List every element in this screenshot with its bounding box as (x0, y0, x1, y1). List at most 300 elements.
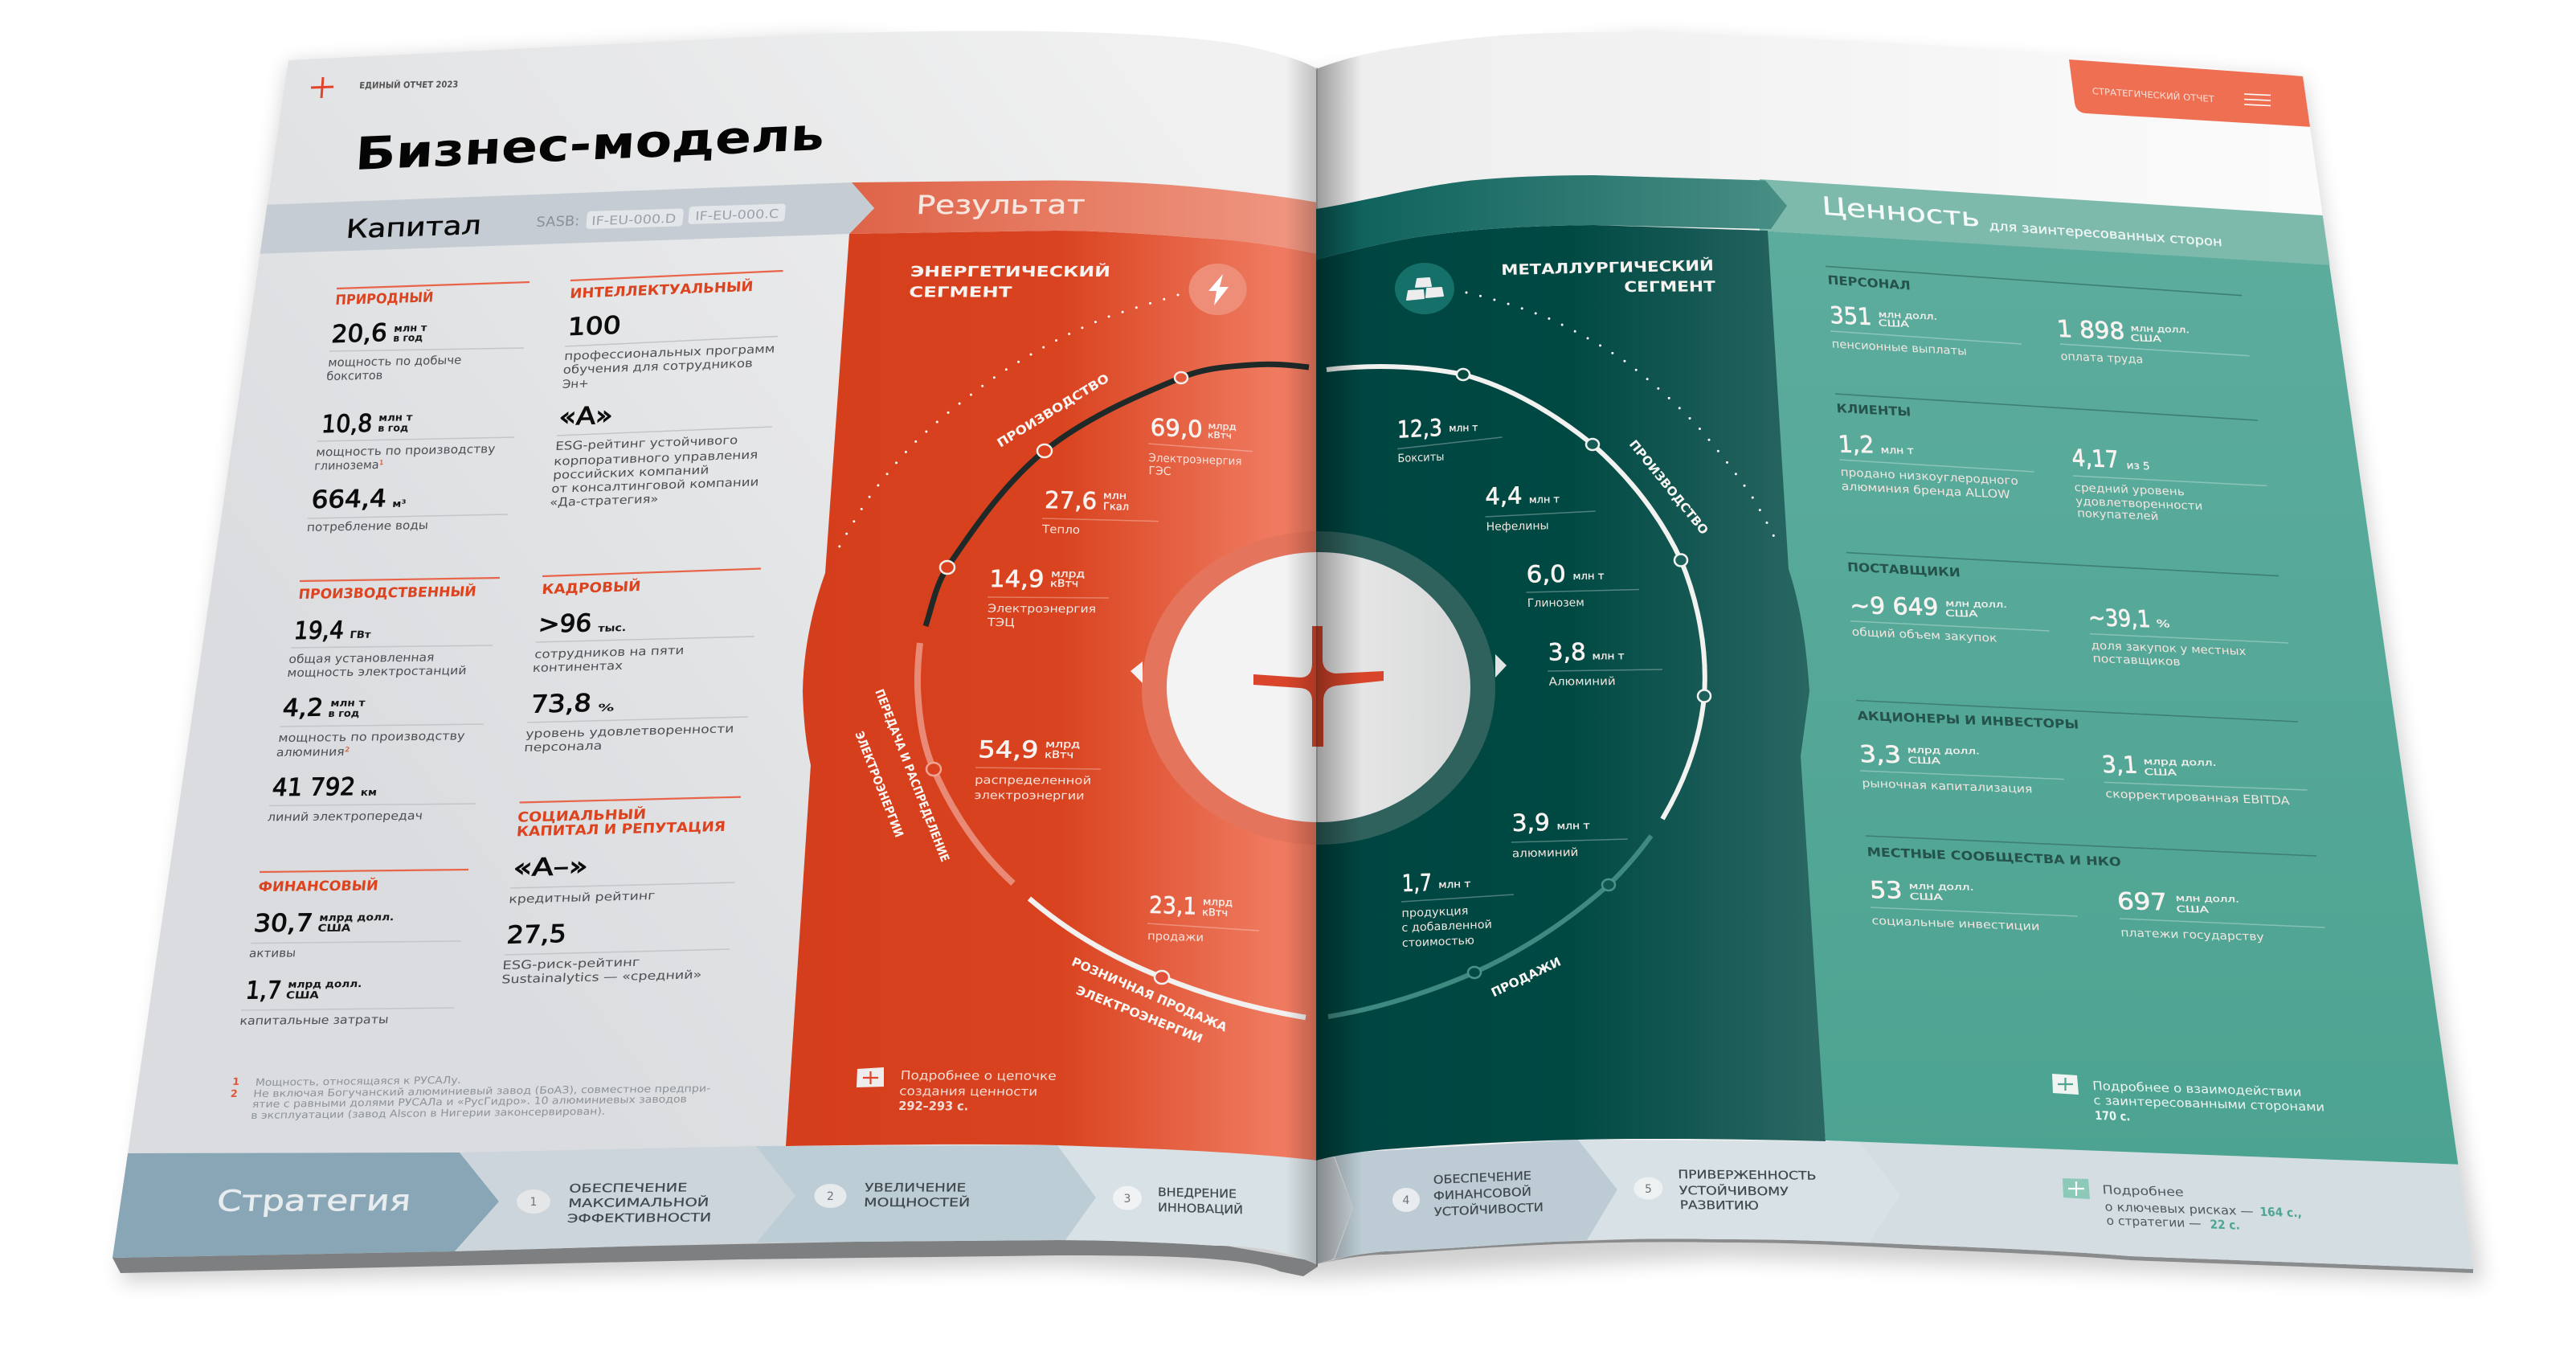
metric 69,0: ГЭС (1149, 465, 1171, 478)
strategy item 1: МАКСИМАЛЬНОЙ (568, 1195, 709, 1210)
metric 3,9: млн т (1556, 819, 1590, 832)
metric 30,7 (252, 909, 395, 938)
description: ESG rating: от консалтинговой компании (551, 476, 759, 496)
description: alumina capacity: глинозема¹ (314, 459, 384, 473)
description: employees: континентах (532, 660, 624, 675)
description: installed capacity: общая установленная (288, 652, 435, 666)
metric 19,4: ГВт (350, 628, 372, 641)
metric 4,2: 4,2 (281, 694, 325, 723)
metric 351: млн долл. (1878, 309, 1937, 322)
metric A: «А» (558, 402, 614, 432)
strategy item 4: ФИНАНСОВОЙ (1433, 1185, 1531, 1203)
stakeholders: shareholders (1856, 701, 2308, 808)
footnotes: ятие с равными долями РУСАЛа и «РусГидро». 10 алюминиевых заводов (251, 1093, 688, 1110)
metric 12,3 (1397, 414, 1503, 465)
right page background (1316, 24, 2481, 1278)
metric 27,6: Тепло (1041, 523, 1080, 537)
stakeholders: personnel (1826, 266, 2250, 366)
ring left half (1142, 531, 1495, 845)
section tab label: СТРАТЕГИЧЕСКИЙ ОТЧЕТ (2092, 86, 2214, 104)
value heading: для заинтересованных сторон (1989, 218, 2222, 249)
stakeholders: communities (1866, 836, 2325, 944)
metric 12,3: млн т (1449, 421, 1478, 434)
metric 20,6: млн т (394, 321, 428, 334)
metric 4,2 (281, 694, 366, 723)
metallurgy segment title: МЕТАЛЛУРГИЧЕСКИЙ (1501, 256, 1714, 279)
left page background (104, 24, 1318, 1278)
metric 27,5: 27,5 (505, 920, 567, 950)
label: retail: РОЗНИЧНАЯ ПРОДАЖА (1069, 955, 1229, 1035)
metric 1 898: млн долл. (2130, 323, 2190, 335)
result heading: Результат (916, 190, 1086, 220)
strategy item 3: ВНЕДРЕНИЕ (1158, 1186, 1237, 1201)
dotted orbit: metallurgy (1466, 293, 1778, 545)
more info text: risks: Подробнее (2102, 1182, 2184, 1199)
more info text: stakeholders (2091, 1079, 2325, 1124)
footnotes: Не включая Богучанский алюминиевый завод (БоАЗ), совместное предпри- (253, 1082, 711, 1099)
metric 100: 100 (566, 312, 622, 342)
metric 9 649: США (1945, 608, 1978, 619)
metric 4,17 (2071, 444, 2267, 523)
metric 1,7 sales: с добавленной (1401, 919, 1492, 935)
more info text: value chain (898, 1068, 1057, 1113)
metric >96: >96 (538, 609, 593, 639)
label: sales: ПРОДАЖИ (1489, 954, 1564, 1000)
metric 1,2: млн т (1880, 444, 1914, 457)
more info text: stakeholders: с заинтересованными сторонами (2093, 1093, 2325, 1115)
metric 1 898: 1 898 (2056, 315, 2126, 345)
capital: industrial (267, 578, 500, 824)
metric 1,7 sales: стоимостью (1402, 934, 1474, 950)
gutter shadow right (1316, 24, 1364, 1278)
more info text: risks: о стратегии — (2106, 1214, 2202, 1230)
metric 53: социальные инвестиции (1871, 915, 2040, 933)
more info text: value chain: создания ценности (899, 1084, 1038, 1099)
description: satisfaction: персонала (524, 739, 603, 755)
description: alumina capacity (314, 443, 496, 473)
metric 1,7 sales: млн т (1438, 878, 1470, 890)
metric 69,0: 69,0 (1151, 414, 1203, 443)
strategy item 5 (1634, 1169, 1817, 1213)
metric 664,4: 664,4 (310, 485, 387, 514)
strategy item 1 (517, 1181, 712, 1226)
footnotes: Мощность, относящаяся к РУСАЛу. (255, 1074, 462, 1088)
SASB label: SASB: (536, 213, 580, 231)
centre disc left (1167, 552, 1470, 822)
description: credit rating: кредитный рейтинг (509, 890, 656, 907)
heading: social (516, 805, 726, 840)
metric 1,7 sales (1401, 869, 1514, 950)
icon: ingots (1395, 263, 1454, 314)
heading: personnel: ПЕРСОНАЛ (1827, 272, 1911, 293)
metric 3,3 (1858, 740, 2064, 796)
strategy item 2: 2 (827, 1190, 834, 1203)
metric 23,1: 23,1 (1149, 891, 1197, 919)
strategy chevron 5 (1578, 1140, 1900, 1247)
metric 1,7 (244, 976, 362, 1005)
description: ESG risk rating (501, 956, 702, 986)
metric 4,17: средний уровень (2074, 481, 2185, 498)
icon: menu (2244, 94, 2271, 106)
metric 3,8 (1548, 638, 1662, 689)
metric 12,3: Бокситы (1397, 451, 1445, 465)
label: retail: ЭЛЕКТРОЭНЕРГИИ (1074, 983, 1204, 1046)
strategy chevron 3 (1058, 1146, 1316, 1264)
metric 3,1: США (2144, 767, 2177, 778)
central ring (1131, 531, 1507, 845)
metric 20,6: в год (393, 331, 423, 344)
strategy arrow band (104, 1153, 499, 1260)
metric 10,8: 10,8 (321, 410, 374, 439)
metric 39,1: % (2156, 617, 2170, 630)
logo mark (311, 77, 333, 98)
metric 69,0: млрд (1208, 421, 1237, 432)
left page (104, 24, 1318, 1278)
strategy chevron 4 (1334, 1140, 1617, 1262)
description: water: потребление воды (306, 519, 429, 534)
strategy title: Стратегия (215, 1184, 412, 1218)
description: installed capacity (287, 652, 467, 680)
metric 9 649: млн долл. (1945, 598, 2007, 610)
more info box: value chain (857, 1067, 884, 1087)
metallurgy header band (1316, 175, 1787, 260)
stakeholders: customers (1835, 394, 2267, 523)
strategy item 1: ОБЕСПЕЧЕНИЕ (569, 1181, 688, 1196)
metric 4,17: удовлетворенности (2075, 495, 2203, 513)
strategy item 3: 3 (1124, 1193, 1131, 1206)
capital: human (524, 569, 761, 755)
value heading (1821, 192, 2222, 249)
capital header (345, 203, 786, 244)
metric 73,8 (530, 690, 615, 719)
metric 73,8: % (598, 701, 615, 714)
metric 3,9: алюминий (1512, 846, 1579, 860)
metric 1,7: США (285, 989, 320, 1001)
metric A-: «А–» (512, 853, 589, 882)
description: alumina capacity: мощность по производству (316, 443, 496, 460)
strategy item 4 (1392, 1170, 1544, 1219)
metric 6,0 (1526, 560, 1639, 610)
SASB chip 1 (586, 208, 684, 229)
left arrowhead (1131, 661, 1143, 683)
metric 3,8: 3,8 (1548, 638, 1586, 665)
metric 3,9: 3,9 (1511, 809, 1550, 837)
metric 14,9 (986, 565, 1109, 629)
icon: lightning bolt (1189, 264, 1247, 315)
metric 69,0 (1148, 414, 1253, 478)
metric 27,6: 27,6 (1045, 486, 1098, 514)
capital title: Капитал (345, 210, 482, 244)
description: ESG rating: корпоративного управления (554, 448, 758, 469)
description: bauxite capacity (326, 354, 462, 383)
metric 19,4: 19,4 (292, 616, 346, 645)
heading: social: СОЦИАЛЬНЫЙ (517, 805, 647, 826)
metric 9 649: ~9 649 (1849, 592, 1939, 620)
strategy chevron 1 (455, 1146, 795, 1251)
heading: financial: ФИНАНСОВЫЙ (257, 877, 379, 895)
description: assets: активы (248, 947, 296, 960)
metric 10,8 (321, 410, 414, 439)
metric 54,9: электроэнергии (974, 789, 1085, 803)
metric 14,9: ТЭЦ (986, 616, 1015, 629)
metric 3,8: млн т (1592, 649, 1625, 661)
heading: customers: КЛИЕНТЫ (1836, 401, 1912, 420)
metric 54,9 (974, 735, 1101, 803)
metric 697: США (2176, 904, 2210, 915)
strategy item 5: РАЗВИТИЮ (1680, 1199, 1759, 1213)
arc: retail (1029, 899, 1306, 1017)
metric 53: 53 (1869, 876, 1903, 904)
metric 4,4: млн т (1529, 493, 1560, 506)
metric 4,2: млн т (330, 697, 366, 709)
label: production metals: ПРОИЗВОДСТВО (1626, 437, 1711, 538)
metric 1 898: США (2130, 333, 2162, 344)
metric 3,1: скорректированная EBITDA (2105, 788, 2291, 808)
metric 14,9: млрд (1051, 567, 1085, 579)
metric 10,8: млн т (378, 411, 414, 424)
metric 20,6: 20,6 (330, 319, 388, 349)
label: transmission (852, 687, 952, 864)
metric 1,7: млрд долл. (288, 977, 362, 990)
metric 1,7: 1,7 (244, 976, 283, 1005)
dotted orbit: energy (836, 295, 1178, 552)
metric 54,9: распределенной (975, 774, 1091, 788)
book page block thickness (112, 1236, 2473, 1276)
metric 39,1: доля закупок у местных (2091, 639, 2247, 658)
metric 14,9: кВтч (1050, 577, 1078, 589)
metric 1 898 (2056, 315, 2250, 366)
strategy item 5: 5 (1645, 1183, 1652, 1196)
strategy item 4: УСТОЙЧИВОСТИ (1434, 1200, 1544, 1219)
metric 14,9: Электроэнергия (987, 603, 1096, 616)
strategy item 1: ЭФФЕКТИВНОСТИ (566, 1212, 712, 1226)
description: satisfaction (524, 723, 734, 755)
more info text: stakeholders: Подробнее о взаимодействии (2091, 1079, 2302, 1099)
more info text: risks: 164 с., (2259, 1205, 2302, 1220)
strategy item 1: 1 (530, 1196, 537, 1209)
metric 23,1: продажи (1147, 930, 1204, 944)
description: bauxite capacity: бокситов (326, 370, 383, 383)
arc: transmission and distribution (918, 643, 1013, 883)
metric 6,0: Глинозем (1527, 596, 1584, 610)
strategy item 3: ИННОВАЦИЙ (1158, 1200, 1243, 1217)
heading: shareholders: АКЦИОНЕРЫ И ИНВЕСТОРЫ (1857, 709, 2079, 732)
metric 1,2: продано низкоуглеродного (1840, 466, 2018, 488)
metric 39,1: ~39,1 (2087, 604, 2152, 633)
description: installed capacity: мощность электростанций (287, 665, 467, 680)
heading: natural: ПРИРОДНЫЙ (335, 288, 434, 309)
description: ESG risk rating: ESG-риск-рейтинг (502, 956, 640, 972)
metric 20,6 (330, 319, 428, 349)
metric 3,1: млрд долл. (2143, 756, 2217, 768)
red result panel (786, 231, 1318, 1161)
value heading: Ценность (1821, 192, 1981, 233)
heading: communities: МЕСТНЫЕ СООБЩЕСТВА И НКО (1867, 845, 2122, 870)
metric 4,17: 4,17 (2071, 444, 2120, 473)
more info text: value chain: Подробнее о цепочке (900, 1068, 1057, 1083)
metric 6,0: млн т (1572, 570, 1605, 582)
description: employees: сотрудников на пяти (534, 645, 685, 661)
metric 9 649 (1849, 592, 2050, 645)
capital: intellectual (550, 271, 783, 510)
description: power lines: линий электропередач (267, 810, 423, 824)
metric 4,17: из 5 (2126, 459, 2150, 472)
footnotes (230, 1074, 711, 1121)
centre cross (1253, 626, 1384, 747)
metric 3,3: рыночная капитализация (1862, 777, 2033, 796)
metric 3,9 (1511, 809, 1628, 860)
section tab (2069, 59, 2312, 127)
heading: industrial: ПРОИЗВОДСТВЕННЫЙ (297, 583, 477, 603)
metric 1 898: оплата труда (2060, 350, 2144, 366)
metric 12,3: 12,3 (1397, 414, 1442, 444)
metric 39,1 (2087, 604, 2288, 669)
metric 3,1 (2101, 751, 2308, 808)
description: satisfaction: уровень удовлетворенности (525, 723, 734, 741)
capital header band (253, 182, 874, 254)
metric 3,1: 3,1 (2101, 751, 2139, 779)
label: transmission: ПЕРЕДАЧА И РАСПРЕДЕЛЕНИЕ (872, 687, 952, 864)
strategy item 4: ОБЕСПЕЧЕНИЕ (1433, 1170, 1531, 1187)
metric 3,8: Алюминий (1548, 675, 1616, 689)
metric 4,2: в год (328, 707, 360, 719)
metric 4,4: 4,4 (1485, 481, 1523, 510)
description: ESG rating: «Да-стратегия» (550, 493, 659, 510)
metric 3,3: 3,3 (1858, 740, 1902, 768)
SASB chip 2: IF-EU-000.C (695, 207, 779, 223)
description: aluminium capacity: алюминия ² (276, 746, 350, 759)
metric 4,4: Нефелины (1486, 519, 1549, 534)
metric 351: пенсионные выплаты (1831, 338, 1967, 358)
metallurgy segment title: СЕГМЕНТ (1624, 278, 1716, 296)
metric 9 649: общий объем закупок (1851, 626, 1997, 645)
metric 1,2: 1,2 (1838, 431, 1875, 458)
strategy item 2: УВЕЛИЧЕНИЕ (865, 1182, 966, 1195)
strategy item 5: ПРИВЕРЖЕННОСТЬ (1678, 1169, 1817, 1183)
metric 30,7: США (317, 922, 352, 934)
label: transmission: ЭЛЕКТРОЭНЕРГИИ (852, 729, 906, 839)
metric 351 (1829, 301, 2022, 358)
description: ESG rating: российских компаний (553, 464, 709, 482)
metric 10,8: в год (378, 421, 409, 434)
metric 351: США (1878, 317, 1910, 330)
metric 1,7 sales: продукция (1401, 905, 1469, 920)
metric 351: 351 (1829, 301, 1872, 330)
heading: suppliers: ПОСТАВЩИКИ (1847, 560, 1961, 580)
capital: natural (306, 282, 530, 534)
SASB chip 2 (688, 203, 786, 224)
more info box: stakeholders (2052, 1074, 2079, 1095)
capital: financial (239, 870, 468, 1028)
metric 3,3: млрд долл. (1907, 745, 1980, 756)
metric 4,4 (1485, 481, 1596, 534)
value panel (1760, 231, 2463, 1165)
footnotes: 2 (230, 1087, 238, 1099)
metric 54,9: кВтч (1045, 748, 1073, 760)
label: production energy: ПРОИЗВОДСТВО (995, 371, 1112, 450)
gutter shadow left (1286, 24, 1318, 1278)
metric 73,8: 73,8 (530, 690, 592, 719)
stakeholders: suppliers (1846, 553, 2288, 669)
metric 53: млн долл. (1908, 881, 1974, 893)
metric 54,9: млрд (1045, 738, 1080, 750)
arc: metal production (1327, 366, 1711, 819)
footnotes: 1 (232, 1075, 240, 1087)
spine line (1316, 68, 1318, 1266)
metric 664,4: м³ (392, 497, 407, 510)
strategy item 5: УСТОЙЧИВОМУ (1679, 1183, 1789, 1198)
description: training: обучения для сотрудников (562, 358, 753, 377)
strategy item 3 (1113, 1186, 1243, 1217)
dark teal panel (1316, 225, 1826, 1161)
page title: Бизнес-модель (354, 108, 826, 181)
arc: energy production (926, 364, 1309, 626)
metric 53: США (1909, 891, 1944, 903)
metric 69,0: Электроэнергия (1149, 452, 1242, 469)
strategy chevron 2 (755, 1145, 1096, 1246)
metric 30,7: млрд долл. (319, 911, 395, 923)
strategy item 2 (815, 1182, 971, 1210)
metric 23,1: кВтч (1202, 906, 1228, 919)
description: training: профессиональных программ (564, 343, 775, 363)
right page (1316, 24, 2481, 1278)
description: training: Эн+ (562, 378, 589, 391)
energy segment title (909, 263, 1110, 301)
metric 27,6: млн (1103, 489, 1126, 502)
metric 697: млн долл. (2175, 893, 2239, 905)
metric 1,2: алюминия бренда ALLOW (1841, 481, 2010, 502)
centre disc right (1167, 552, 1470, 822)
heading: intellectual: ИНТЕЛЛЕКТУАЛЬНЫЙ (570, 277, 754, 302)
metric 69,0: кВтч (1208, 430, 1232, 441)
metric 14,9: 14,9 (989, 565, 1045, 592)
energy segment title: ЭНЕРГЕТИЧЕСКИЙ (910, 263, 1110, 280)
metric 41 792: 41 792 (271, 773, 357, 802)
result header band (849, 180, 1318, 254)
metric 53 (1869, 876, 2078, 933)
metric >96 (538, 609, 627, 639)
heading: human: КАДРОВЫЙ (542, 577, 641, 598)
description: training (562, 343, 775, 391)
description: aluminium capacity (276, 730, 466, 759)
metric 23,1 (1147, 891, 1259, 944)
metric 27,6: Гкал (1103, 500, 1129, 513)
strategy links band (1858, 1141, 2479, 1278)
metric 23,1: млрд (1203, 895, 1233, 908)
metric >96: тыс. (598, 621, 627, 634)
ring right half (1142, 531, 1495, 845)
more info text: risks (2102, 1182, 2302, 1233)
metric 54,9: 54,9 (978, 735, 1039, 764)
metric 1,2 (1838, 431, 2034, 502)
energy segment title: СЕГМЕНТ (909, 285, 1013, 301)
strategy item 4: 4 (1403, 1194, 1410, 1207)
metric 39,1: поставщиков (2092, 653, 2181, 669)
strategy chevron tail (1316, 1157, 1353, 1270)
more info box: risks (2063, 1178, 2090, 1199)
metric 6,0: 6,0 (1526, 560, 1566, 588)
description: ESG rating: ESG-рейтинг устойчивого (555, 434, 738, 453)
metric 4,17: покупателей (2077, 507, 2159, 523)
right arrowhead (1495, 654, 1507, 678)
report name: ЕДИНЫЙ ОТЧЕТ 2023 (359, 80, 459, 91)
arc: metal sales (1328, 836, 1651, 1017)
description: ESG risk rating: Sustainalytics — «средний» (501, 968, 702, 986)
more info text: risks: о ключевых рисках — (2104, 1200, 2254, 1218)
description: capex: капитальные затраты (239, 1013, 389, 1028)
metric 3,3: США (1907, 755, 1941, 766)
more info text: risks: 22 с. (2210, 1218, 2240, 1233)
